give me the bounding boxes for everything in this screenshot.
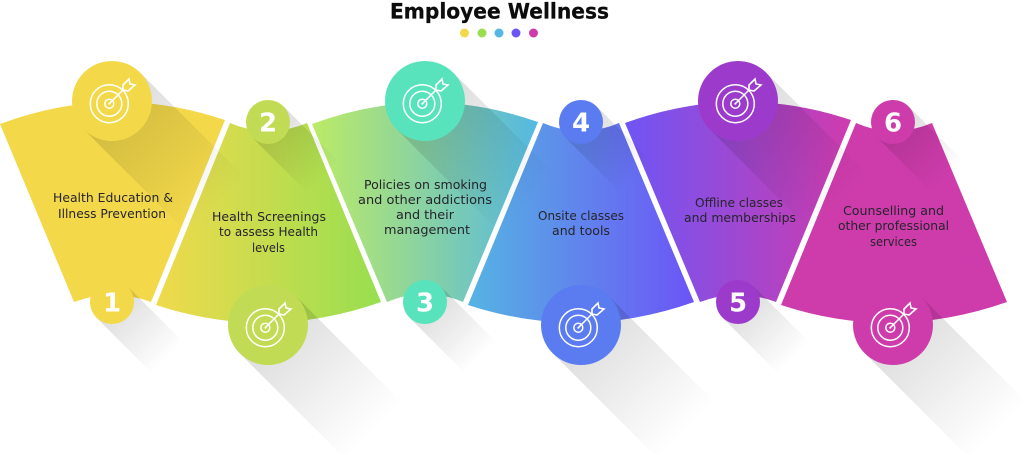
text: health screenings: to assess Health	[219, 224, 318, 239]
text: policies: management	[384, 222, 470, 237]
text: health education: Health Education &	[53, 190, 173, 205]
number badge 4: 4	[572, 108, 590, 138]
text: policies: and other addictions	[358, 192, 492, 207]
number badge 3: 3	[416, 288, 434, 318]
number badge 4	[559, 100, 603, 144]
number badge 2: 2	[259, 108, 277, 138]
text: health screenings: levels	[252, 240, 285, 255]
panel 5 shape	[625, 102, 851, 302]
long shadows	[84, 73, 1024, 455]
text: offline classes: and memberships	[684, 210, 796, 225]
number badge 6	[871, 100, 915, 144]
text: health screenings	[212, 209, 326, 255]
number badge 1: 1	[103, 288, 121, 318]
text: counselling: Counselling and	[843, 203, 944, 218]
text: policies: Policies on smoking	[364, 177, 487, 192]
text: counselling: other professional	[838, 218, 949, 233]
text: counselling	[838, 203, 949, 249]
icon badge 6	[853, 285, 933, 365]
title: Employee Wellness	[390, 0, 609, 24]
text: onsite classes	[538, 208, 624, 238]
panel 3 shape	[312, 102, 538, 302]
panel 2 shape	[156, 123, 381, 323]
text: health screenings: Health Screenings	[212, 209, 326, 224]
text: policies: and their	[396, 207, 455, 222]
number badge 1	[90, 280, 134, 324]
text: health education	[53, 190, 173, 221]
text: counselling: services	[870, 234, 917, 249]
text: health education: Illness Prevention	[58, 206, 166, 221]
icon badge 3	[385, 61, 465, 141]
number badge 6: 6	[884, 108, 902, 138]
icon badge 2	[228, 285, 308, 365]
number badge 3	[403, 280, 447, 324]
number badge 5: 5	[729, 288, 747, 318]
text: offline classes	[684, 195, 796, 225]
number badge 2	[246, 100, 290, 144]
panel 6 shape	[781, 123, 1007, 323]
text: policies	[358, 177, 492, 237]
text: onsite classes: and tools	[552, 223, 610, 238]
panel 1 shape	[0, 102, 225, 302]
text: onsite classes: Onsite classes	[538, 208, 624, 223]
icon badge 5	[698, 61, 778, 141]
text: offline classes: Offline classes	[695, 195, 783, 210]
legend dots	[460, 28, 538, 38]
icon badge 4	[541, 285, 621, 365]
panel 4 shape	[468, 123, 694, 323]
icon badge 1	[72, 61, 152, 141]
number badge 5	[716, 280, 760, 324]
